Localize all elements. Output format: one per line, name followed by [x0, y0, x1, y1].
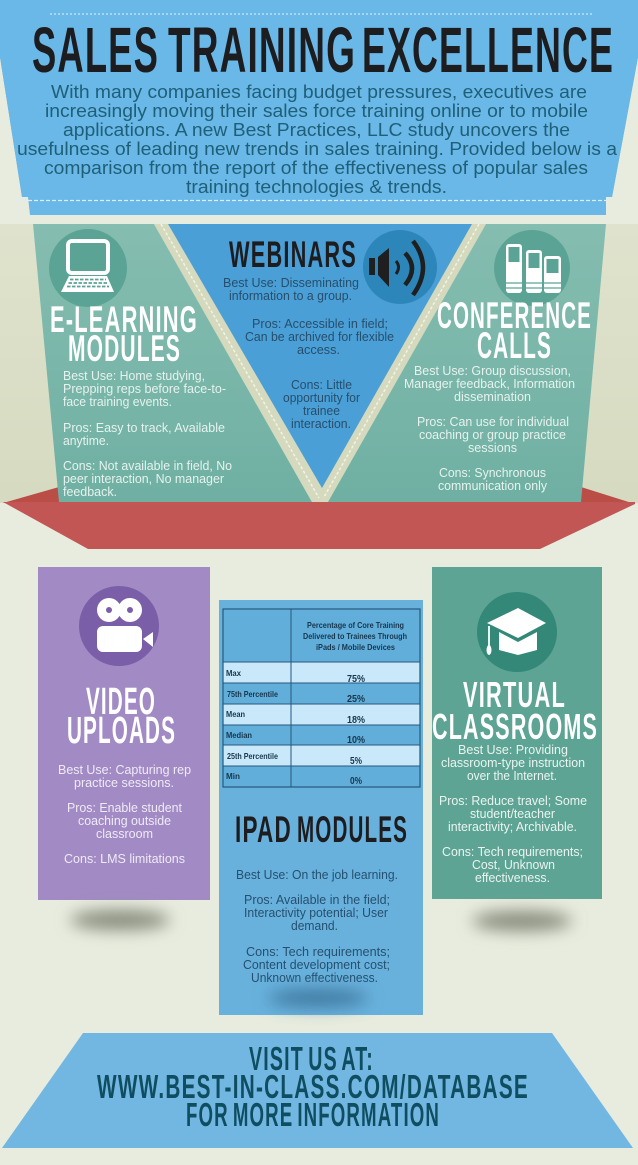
ipad modules text: Cons: Tech requirements; — [246, 944, 390, 959]
shadow: video uploads — [70, 910, 170, 930]
conference calls text: coaching or group practice — [419, 427, 566, 442]
ipad modules text: Pros: Available in the field; — [244, 892, 390, 907]
table: core training delivered through ipads: Max — [226, 668, 241, 678]
chevron strip — [154, 224, 486, 502]
ipad modules text — [236, 867, 398, 985]
footer call to action — [97, 1040, 529, 1133]
heading: virtual classrooms: VIRTUAL — [463, 674, 566, 715]
e-learning text: peer interaction, No manager — [63, 471, 225, 486]
intro paragraph: increasingly moving their sales force training online or to mobile — [45, 101, 588, 121]
panel: conference calls — [328, 224, 606, 502]
webinars text: Can be archived for flexible — [245, 329, 394, 344]
shadow: virtual classrooms — [472, 911, 572, 931]
heading: virtual classrooms — [432, 674, 598, 747]
heading: e-learning modules: E-LEARNING — [50, 299, 198, 340]
conference calls text: Pros: Can use for individual — [417, 414, 569, 429]
ipad modules text: Content development cost; — [243, 957, 390, 972]
video uploads text: classroom — [96, 826, 153, 841]
conference calls text: communication only — [438, 478, 547, 493]
intro paragraph: training technologies & trends. — [186, 177, 447, 197]
background band — [0, 224, 638, 503]
e-learning text: Prepping reps before face-to- — [63, 381, 226, 396]
virtual classrooms text: effectiveness. — [475, 870, 550, 885]
e-learning text: Best Use: Home studying, — [63, 368, 205, 383]
table: core training delivered through ipads: Mean — [226, 709, 245, 719]
virtual classrooms text — [439, 742, 587, 885]
heading: ipad modules: IPAD — [235, 809, 292, 850]
intro paragraph — [17, 82, 618, 197]
conference calls text: Cons: Synchronous — [439, 465, 546, 480]
intro paragraph: With many companies facing budget pressures, executives are — [51, 82, 587, 102]
video uploads text: Cons: LMS limitations — [64, 851, 185, 866]
table: core training delivered through ipads: 25% — [347, 693, 366, 705]
footer call to action: FOR MORE INFORMATION — [186, 1096, 440, 1133]
ipad modules text: Interactivity potential; User — [244, 905, 389, 920]
webinars text: access. — [297, 342, 340, 357]
webinars text: interaction. — [291, 416, 351, 431]
heading: webinars: WEBINARS — [229, 234, 357, 275]
panel: video uploads — [38, 567, 210, 900]
shadow: ipad modules — [268, 989, 368, 1007]
conference calls text: Best Use: Group discussion, — [414, 363, 571, 378]
table: core training delivered through ipads: 5% — [350, 755, 363, 767]
table: core training delivered through ipads: 75th Percentile — [227, 689, 278, 699]
heading: conference calls — [437, 295, 592, 366]
table: core training delivered through ipads: Delivered to Trainees Through — [303, 631, 407, 641]
virtual classrooms text: over the Internet. — [467, 768, 557, 783]
table: core training delivered through ipads: 0% — [350, 775, 363, 787]
virtual classrooms text: Cost, Unknown — [472, 857, 555, 872]
webinars text: Pros: Accessible in field; — [252, 316, 388, 331]
icon: video camera — [79, 586, 159, 666]
e-learning text — [63, 368, 232, 499]
footer banner — [2, 1033, 633, 1148]
ipad modules text: Unknown effectiveness. — [251, 970, 378, 985]
table: core training delivered through ipads: iPads / Mobile Devices — [316, 642, 395, 652]
table: core training delivered through ipads: 25th Percentile — [227, 751, 278, 761]
red ribbon — [3, 487, 635, 549]
ipad modules text: demand. — [291, 918, 338, 933]
webinars text: Cons: Little — [291, 377, 352, 392]
conference calls text: sessions — [468, 440, 517, 455]
e-learning text: feedback. — [63, 484, 117, 499]
header banner — [0, 0, 638, 215]
webinars text: Best Use: Disseminating — [223, 275, 359, 290]
panel: virtual classrooms — [432, 567, 602, 899]
video uploads text: Best Use: Capturing rep — [58, 762, 191, 777]
table: core training delivered through ipads — [223, 609, 420, 787]
conference calls text: dissemination — [454, 389, 531, 404]
video uploads text: coaching outside — [78, 813, 171, 828]
table: core training delivered through ipads: 18% — [347, 714, 366, 726]
intro paragraph: applications. A new Best Practices, LLC study uncovers the — [63, 120, 570, 140]
intro paragraph: usefulness of leading new trends in sales training. Provided below is a — [17, 139, 618, 159]
conference calls text: Manager feedback, Information — [404, 376, 575, 391]
virtual classrooms text: student/teacher — [470, 806, 556, 821]
panel: webinars — [168, 224, 472, 488]
icon: phones — [494, 230, 570, 306]
table: core training delivered through ipads: Min — [226, 771, 240, 781]
title — [32, 14, 614, 86]
title: TRAINING — [168, 14, 356, 86]
title: SALES — [32, 14, 159, 86]
webinars text: information to a group. — [229, 288, 352, 303]
virtual classrooms text: classroom-type instruction — [441, 755, 585, 770]
icon: speaker — [363, 230, 437, 304]
panel: ipad modules — [219, 600, 423, 1015]
virtual classrooms text: Cons: Tech requirements; — [442, 844, 583, 859]
webinars text: trainee — [303, 403, 340, 418]
heading: ipad modules: MODULES — [297, 809, 408, 850]
virtual classrooms text: interactivity; Archivable. — [448, 819, 577, 834]
virtual classrooms text: Pros: Reduce travel; Some — [439, 793, 587, 808]
video uploads text: Pros: Enable student — [67, 800, 182, 815]
heading: video uploads: UPLOADS — [67, 710, 176, 752]
virtual classrooms text: Best Use: Providing — [458, 742, 568, 757]
panel: e-learning modules — [33, 224, 312, 502]
heading: e-learning modules — [50, 299, 198, 369]
icon: laptop — [49, 229, 127, 307]
intro paragraph: comparison from the report of the effectiveness of popular sales — [44, 158, 588, 178]
heading: e-learning modules: MODULES — [68, 328, 181, 369]
table: core training delivered through ipads: Percentage of Core Training — [307, 620, 404, 630]
icon: graduation cap — [477, 592, 557, 672]
video uploads text: practice sessions. — [74, 775, 174, 790]
table: core training delivered through ipads: 75% — [347, 673, 366, 685]
conference calls text — [404, 363, 575, 493]
webinars text: opportunity for — [283, 390, 361, 405]
ipad modules text: Best Use: On the job learning. — [236, 867, 398, 882]
video uploads text — [58, 762, 191, 866]
heading: ipad modules — [235, 809, 408, 850]
footer call to action: VISIT US AT: — [249, 1040, 374, 1077]
heading: video uploads: VIDEO — [86, 681, 156, 723]
webinars text — [223, 275, 394, 431]
heading: conference calls: CALLS — [477, 325, 552, 366]
e-learning text: anytime. — [63, 433, 109, 448]
e-learning text: Cons: Not available in field, No — [63, 458, 232, 473]
e-learning text: Pros: Easy to track, Available — [63, 420, 225, 435]
heading: video uploads — [67, 681, 176, 752]
e-learning text: face training events. — [63, 394, 172, 409]
table: core training delivered through ipads: Median — [226, 730, 252, 740]
table: core training delivered through ipads: 10% — [347, 734, 366, 746]
